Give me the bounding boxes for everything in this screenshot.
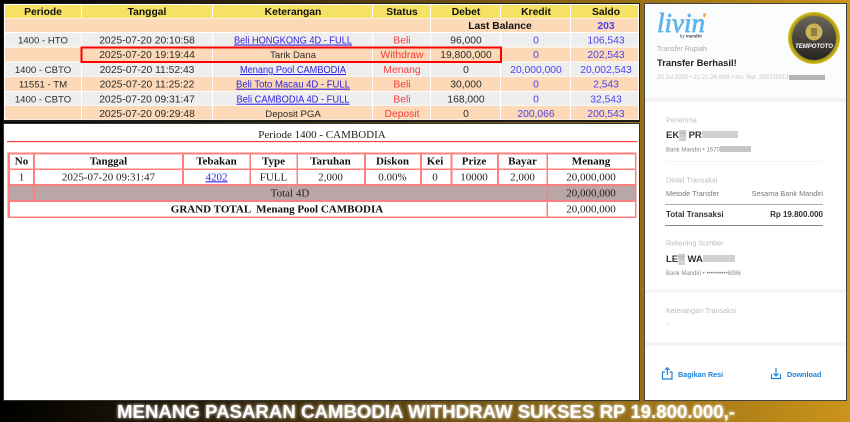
transaction detail: Detail Transaksi	[666, 176, 718, 184]
row withdraw: Withdraw	[381, 50, 424, 61]
row 11551 TM: 2,543	[593, 80, 619, 91]
grand total row: GRAND TOTAL Menang Pool CAMBODIA	[171, 203, 383, 215]
header cells: No	[15, 156, 29, 168]
row withdraw: 0	[533, 50, 539, 61]
total 4D row: Total 4D	[271, 187, 309, 199]
row deposit: 0	[463, 109, 469, 120]
tempototo badge	[788, 12, 840, 64]
data cells: 10000	[460, 171, 488, 183]
row 1400 CBTO bet: Beli CAMBODIA 4D - FULL	[236, 95, 350, 106]
row 11551 TM: 0	[533, 80, 539, 91]
recipient: Penerima	[666, 116, 697, 124]
row deposit: 200,066	[517, 109, 555, 120]
header cells	[10, 154, 635, 168]
row 1400 CBTO bet	[15, 95, 622, 106]
livin logo: by mandiri	[680, 34, 702, 38]
data cells	[10, 170, 635, 184]
transaction detail: Metode Transfer	[666, 189, 720, 198]
row 1400 HTO	[18, 36, 625, 46]
transaction note: -	[666, 319, 669, 328]
header cells: Diskon	[376, 156, 409, 168]
data cells: 2,000	[510, 171, 535, 183]
row 1400 HTO: Beli HONGKONG 4D - FULL	[234, 36, 352, 46]
row 1400 HTO: 2025-07-20 20:10:58	[99, 36, 195, 46]
receipt heading: Transfer Berhasil!	[657, 57, 737, 68]
download action: Download	[787, 370, 821, 379]
download action	[772, 368, 821, 379]
table header row	[5, 5, 638, 18]
row 1400 CBTO bet: 32,543	[590, 95, 622, 106]
share action: Bagikan Resi	[678, 370, 723, 379]
transaction detail: Rp 19.800.000	[770, 210, 824, 219]
banner headline: MENANG PASARAN CAMBODIA WITHDRAW SUKSES RP 19.800.000,-	[117, 402, 735, 422]
data cells: FULL	[260, 171, 288, 183]
row 1400 CBTO win: 2025-07-20 11:52:43	[100, 65, 195, 76]
transaction detail	[665, 176, 824, 226]
recipient	[665, 116, 823, 162]
share action	[662, 368, 723, 379]
data cells: 4202	[206, 171, 228, 183]
table header row: Status	[386, 7, 418, 18]
header cells: Menang	[572, 156, 611, 168]
header cells: Taruhan	[310, 156, 351, 168]
header cells: Tanggal	[90, 156, 127, 168]
row 1400 CBTO win: 20,000,000	[510, 65, 562, 76]
row 1400 CBTO win	[15, 65, 632, 76]
row withdraw: 19,800,000	[440, 50, 492, 61]
row backgrounds	[5, 18, 638, 120]
row 1400 CBTO win: Menang	[383, 65, 421, 76]
row 1400 CBTO win: 20,002,543	[580, 65, 632, 76]
total 4D row	[10, 186, 635, 200]
bet detail table	[8, 152, 636, 218]
row 1400 HTO: 106,543	[587, 36, 625, 46]
highlight box on withdraw row	[82, 48, 501, 62]
total 4D row: 20,000,000	[566, 187, 616, 199]
last balance row: Last Balance	[468, 21, 532, 32]
header cells: Tebakan	[196, 156, 237, 168]
panel: transfer receipt	[644, 3, 847, 401]
transaction note: Keterangan Transaksi	[666, 306, 736, 315]
row 11551 TM: 2025-07-20 11:25:22	[100, 80, 195, 91]
header cells: Kei	[427, 156, 443, 168]
table header row: Keterangan	[265, 7, 321, 18]
row 1400 CBTO bet: 168,000	[447, 95, 485, 106]
transaction detail: Sesama Bank Mandiri	[752, 189, 823, 198]
panel: transaction ledger table	[3, 3, 640, 122]
last balance row	[468, 21, 615, 32]
row 1400 CBTO bet: 1400 - CBTO	[15, 95, 71, 106]
row 11551 TM	[19, 80, 619, 91]
grand total row	[10, 202, 635, 216]
table header row: Saldo	[592, 7, 620, 18]
tempototo badge: TEMPOTOTO	[795, 44, 833, 50]
row 1400 CBTO bet: 0	[533, 95, 539, 106]
row 11551 TM: Beli Toto Macau 4D - FULL	[236, 80, 350, 91]
transaction note	[666, 306, 736, 328]
source account: Rekening Sumber	[666, 238, 724, 248]
data cells: 0.00%	[378, 171, 407, 183]
data cells: 2025-07-20 09:31:47	[62, 171, 156, 183]
source account: LE▒ WA	[666, 254, 703, 265]
row 11551 TM: 30,000	[450, 80, 482, 91]
source account	[666, 238, 741, 277]
data cells: 20,000,000	[566, 171, 616, 183]
row 1400 HTO: 1400 - HTO	[18, 36, 68, 46]
row 1400 CBTO bet: Beli	[393, 95, 411, 106]
row 1400 CBTO bet: 2025-07-20 09:31:47	[99, 95, 195, 106]
transaction detail: Total Transaksi	[666, 210, 724, 219]
header cells: Prize	[462, 156, 486, 168]
row deposit: Deposit PGA	[265, 109, 321, 120]
row 1400 CBTO win: 0	[463, 65, 469, 76]
row 11551 TM: 11551 - TM	[19, 80, 67, 91]
row deposit	[99, 109, 625, 120]
row withdraw: Tarik Dana	[270, 50, 317, 61]
data cells: 1	[19, 171, 24, 183]
receipt heading: 20 Jul 2025 • 21:21:26 WIB • No. Ref. 250720112	[657, 75, 789, 81]
header cells: Type	[262, 156, 285, 168]
row 1400 CBTO win: 1400 - CBTO	[15, 65, 71, 76]
panel: period detail	[3, 123, 640, 401]
row 1400 HTO: 0	[533, 36, 539, 46]
table header row: Debet	[452, 7, 481, 18]
recipient: EK▒ PR	[666, 130, 702, 141]
receipt heading: Transfer Rupiah	[657, 46, 707, 53]
row 11551 TM: Beli	[393, 80, 411, 91]
livin logo: livin	[657, 8, 705, 38]
row deposit: 2025-07-20 09:29:48	[99, 109, 195, 120]
source account: Bank Mandiri • ••••••••••6086	[666, 271, 741, 277]
table header row: Periode	[24, 7, 62, 18]
row deposit: Deposit	[385, 109, 420, 120]
row deposit: 200,543	[587, 109, 625, 120]
table header row: Tanggal	[128, 7, 166, 18]
row 1400 HTO: Beli	[393, 36, 411, 46]
header cells: Bayar	[508, 156, 537, 168]
receipt heading	[657, 46, 825, 81]
recipient: Bank Mandiri • 1670	[666, 148, 720, 154]
period heading: Periode 1400 - CAMBODIA	[258, 129, 386, 141]
row 1400 CBTO win: Menang Pool CAMBODIA	[240, 65, 346, 76]
data cells: 0	[432, 171, 438, 183]
data cells: 2,000	[318, 171, 343, 183]
table header row: Kredit	[521, 7, 551, 18]
row withdraw	[99, 50, 625, 61]
grand total row: 20,000,000	[566, 203, 616, 215]
row withdraw: 202,543	[587, 50, 625, 61]
last balance row: 203	[597, 21, 615, 32]
row withdraw: 2025-07-20 19:19:44	[99, 50, 195, 61]
banner headline: MENANG PASARAN CAMBODIA WITHDRAW SUKSES RP 19.800.000,-	[117, 402, 735, 422]
row 1400 HTO: 96,000	[450, 36, 482, 46]
